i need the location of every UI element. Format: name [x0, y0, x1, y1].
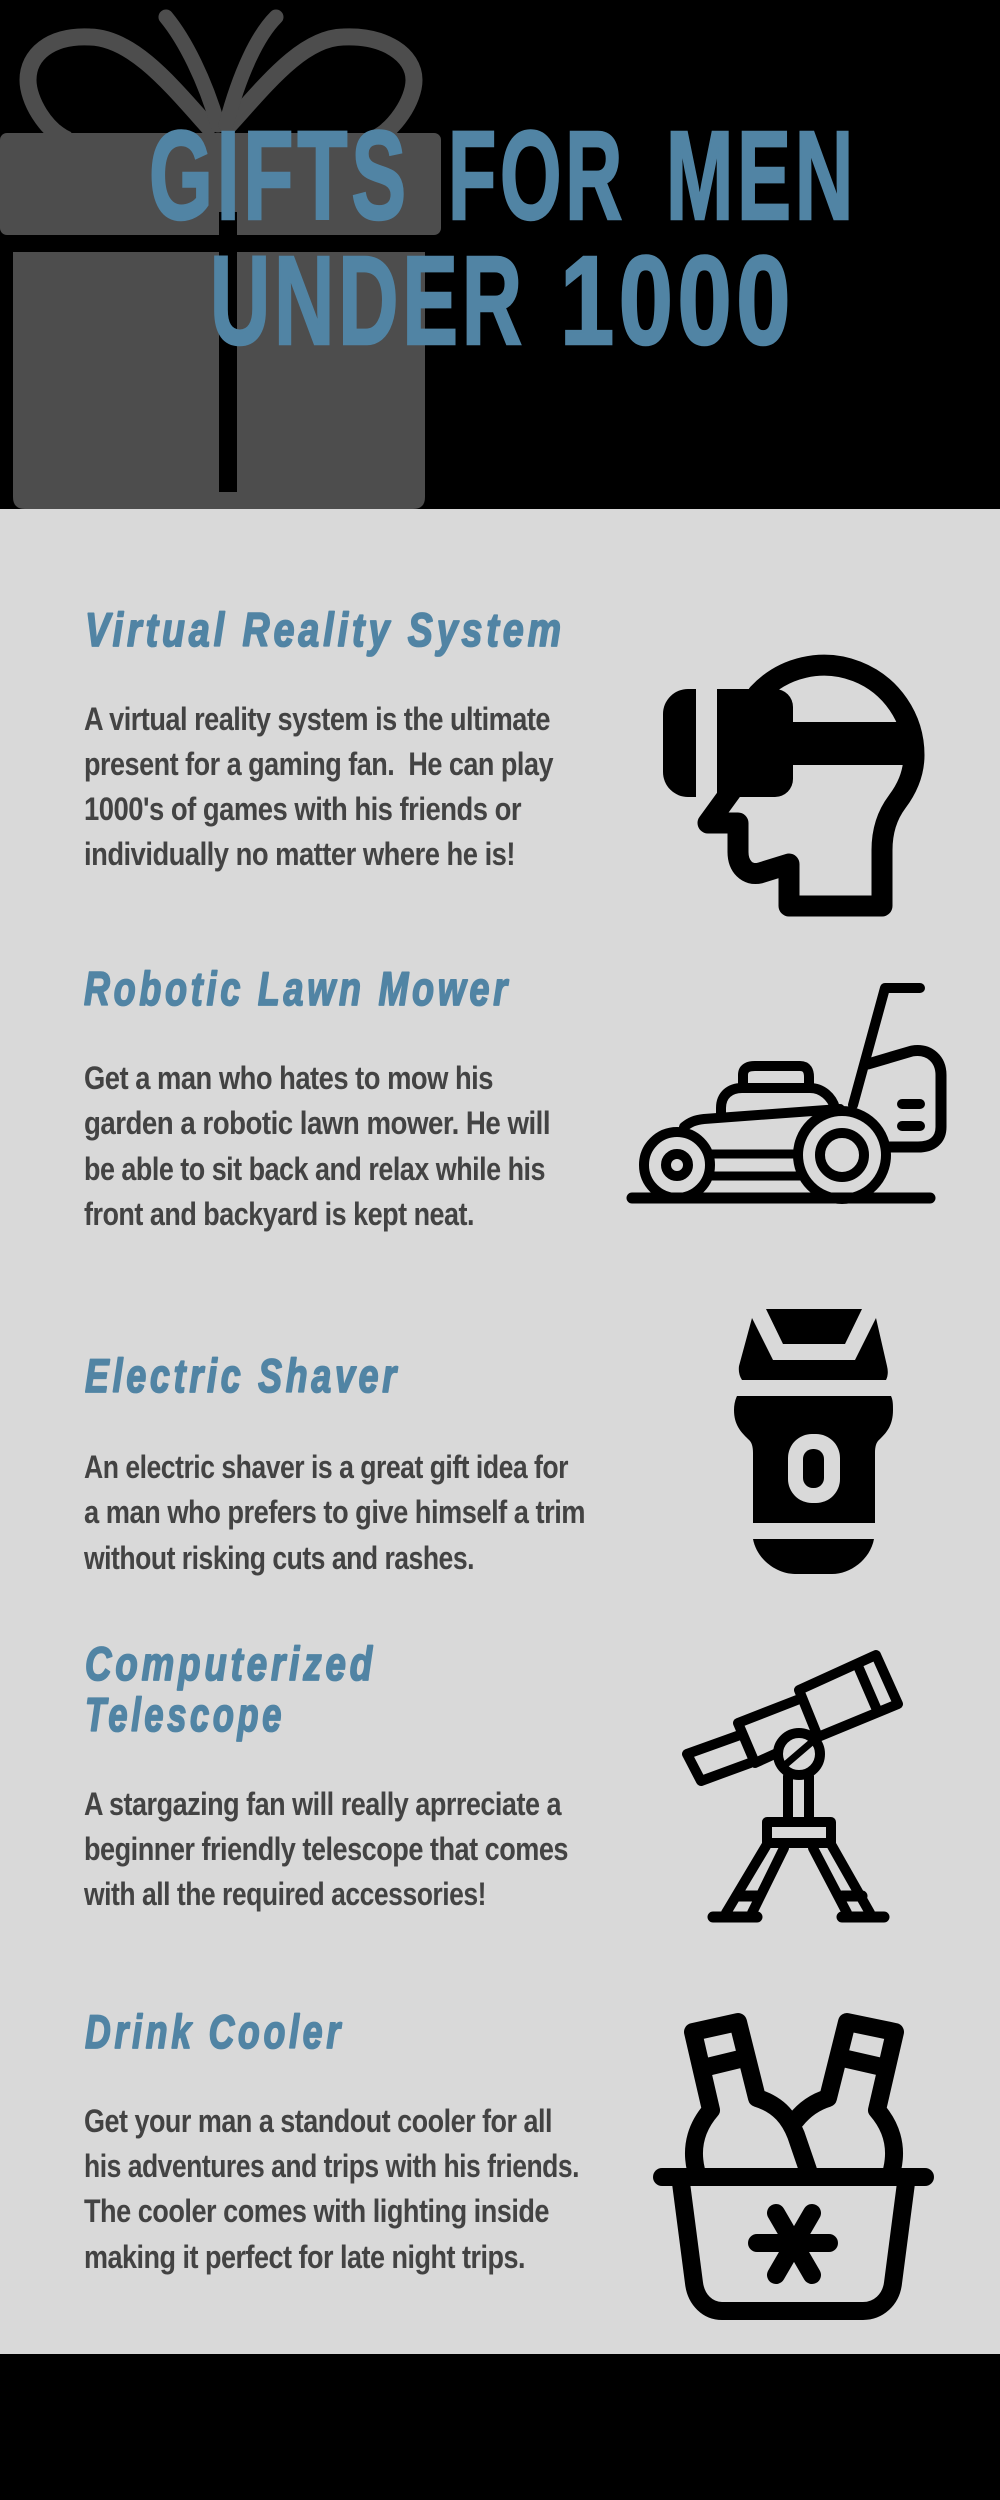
text: drink cooler description: The cooler comes with lighting inside	[84, 2193, 549, 2229]
icon: drink cooler with bottles	[662, 2022, 925, 2311]
text: telescope description	[83, 1786, 568, 1912]
text: lawn mower description: be able to sit back and relax while his	[84, 1151, 545, 1187]
text: drink cooler description	[84, 2103, 579, 2275]
text: electric shaver description: a man who prefers to give himself a trim	[84, 1494, 585, 1530]
title: MEN	[666, 105, 857, 246]
title: 1000	[560, 230, 795, 371]
text: virtual reality description: present for a gaming fan. He can play	[84, 746, 553, 782]
content panel background	[0, 509, 1000, 2354]
icon: lawn mower	[632, 988, 941, 1199]
panel: drink cooler	[84, 2005, 925, 2311]
heading: robotic lawn mower: Robotic Lawn Mower	[84, 962, 511, 1015]
text: electric shaver description: An electric shaver is a great gift idea for	[84, 1449, 569, 1485]
title: GIFTS	[149, 105, 410, 246]
icon: electric shaver	[734, 1309, 893, 1574]
text: virtual reality description: A virtual reality system is the ultimate	[84, 701, 550, 737]
text: lawn mower description: Get a man who hates to mow his	[84, 1060, 493, 1096]
text: lawn mower description: front and backyard is kept neat.	[84, 1196, 474, 1232]
text: telescope description: beginner friendly telescope that comes	[84, 1831, 568, 1867]
text: drink cooler description: Get your man a standout cooler for all	[84, 2103, 552, 2139]
text: telescope description: A stargazing fan will really aprreciate a	[84, 1786, 562, 1822]
text: electric shaver description: without risking cuts and rashes.	[83, 1540, 474, 1576]
panel: robotic lawn mower	[84, 962, 941, 1232]
title	[149, 105, 857, 371]
icon: gift box	[0, 17, 441, 509]
footer band	[0, 2354, 1000, 2500]
heading: computerized telescope: Telescope	[85, 1688, 285, 1741]
heading: drink cooler: Drink Cooler	[85, 2005, 344, 2058]
text: virtual reality description: 1000's of games with his friends or	[84, 791, 522, 827]
heading: computerized telescope: Computerized	[85, 1637, 376, 1690]
panel: electric shaver	[83, 1309, 893, 1576]
header background	[0, 0, 1000, 509]
text: electric shaver description	[83, 1449, 585, 1576]
text: virtual reality description: individually no matter where he is!	[84, 836, 515, 872]
icon: telescope	[687, 1655, 898, 1917]
panel: virtual reality system	[84, 603, 914, 906]
icon: VR headset on head	[663, 665, 914, 906]
panel: computerized telescope	[83, 1637, 898, 1917]
heading: computerized telescope	[85, 1637, 376, 1741]
text: telescope description: with all the required accessories!	[83, 1876, 486, 1912]
title: UNDER	[210, 230, 526, 371]
text: lawn mower description	[84, 1060, 550, 1232]
text: lawn mower description: garden a robotic lawn mower. He will	[84, 1105, 550, 1141]
text: drink cooler description: making it perfect for late night trips.	[84, 2239, 525, 2275]
text: drink cooler description: his adventures and trips with his friends.	[84, 2148, 579, 2184]
heading: electric shaver: Electric Shaver	[85, 1349, 400, 1402]
text: virtual reality description	[84, 701, 553, 872]
title: FOR	[448, 105, 626, 246]
heading: virtual reality system: Virtual Reality System	[85, 603, 565, 656]
